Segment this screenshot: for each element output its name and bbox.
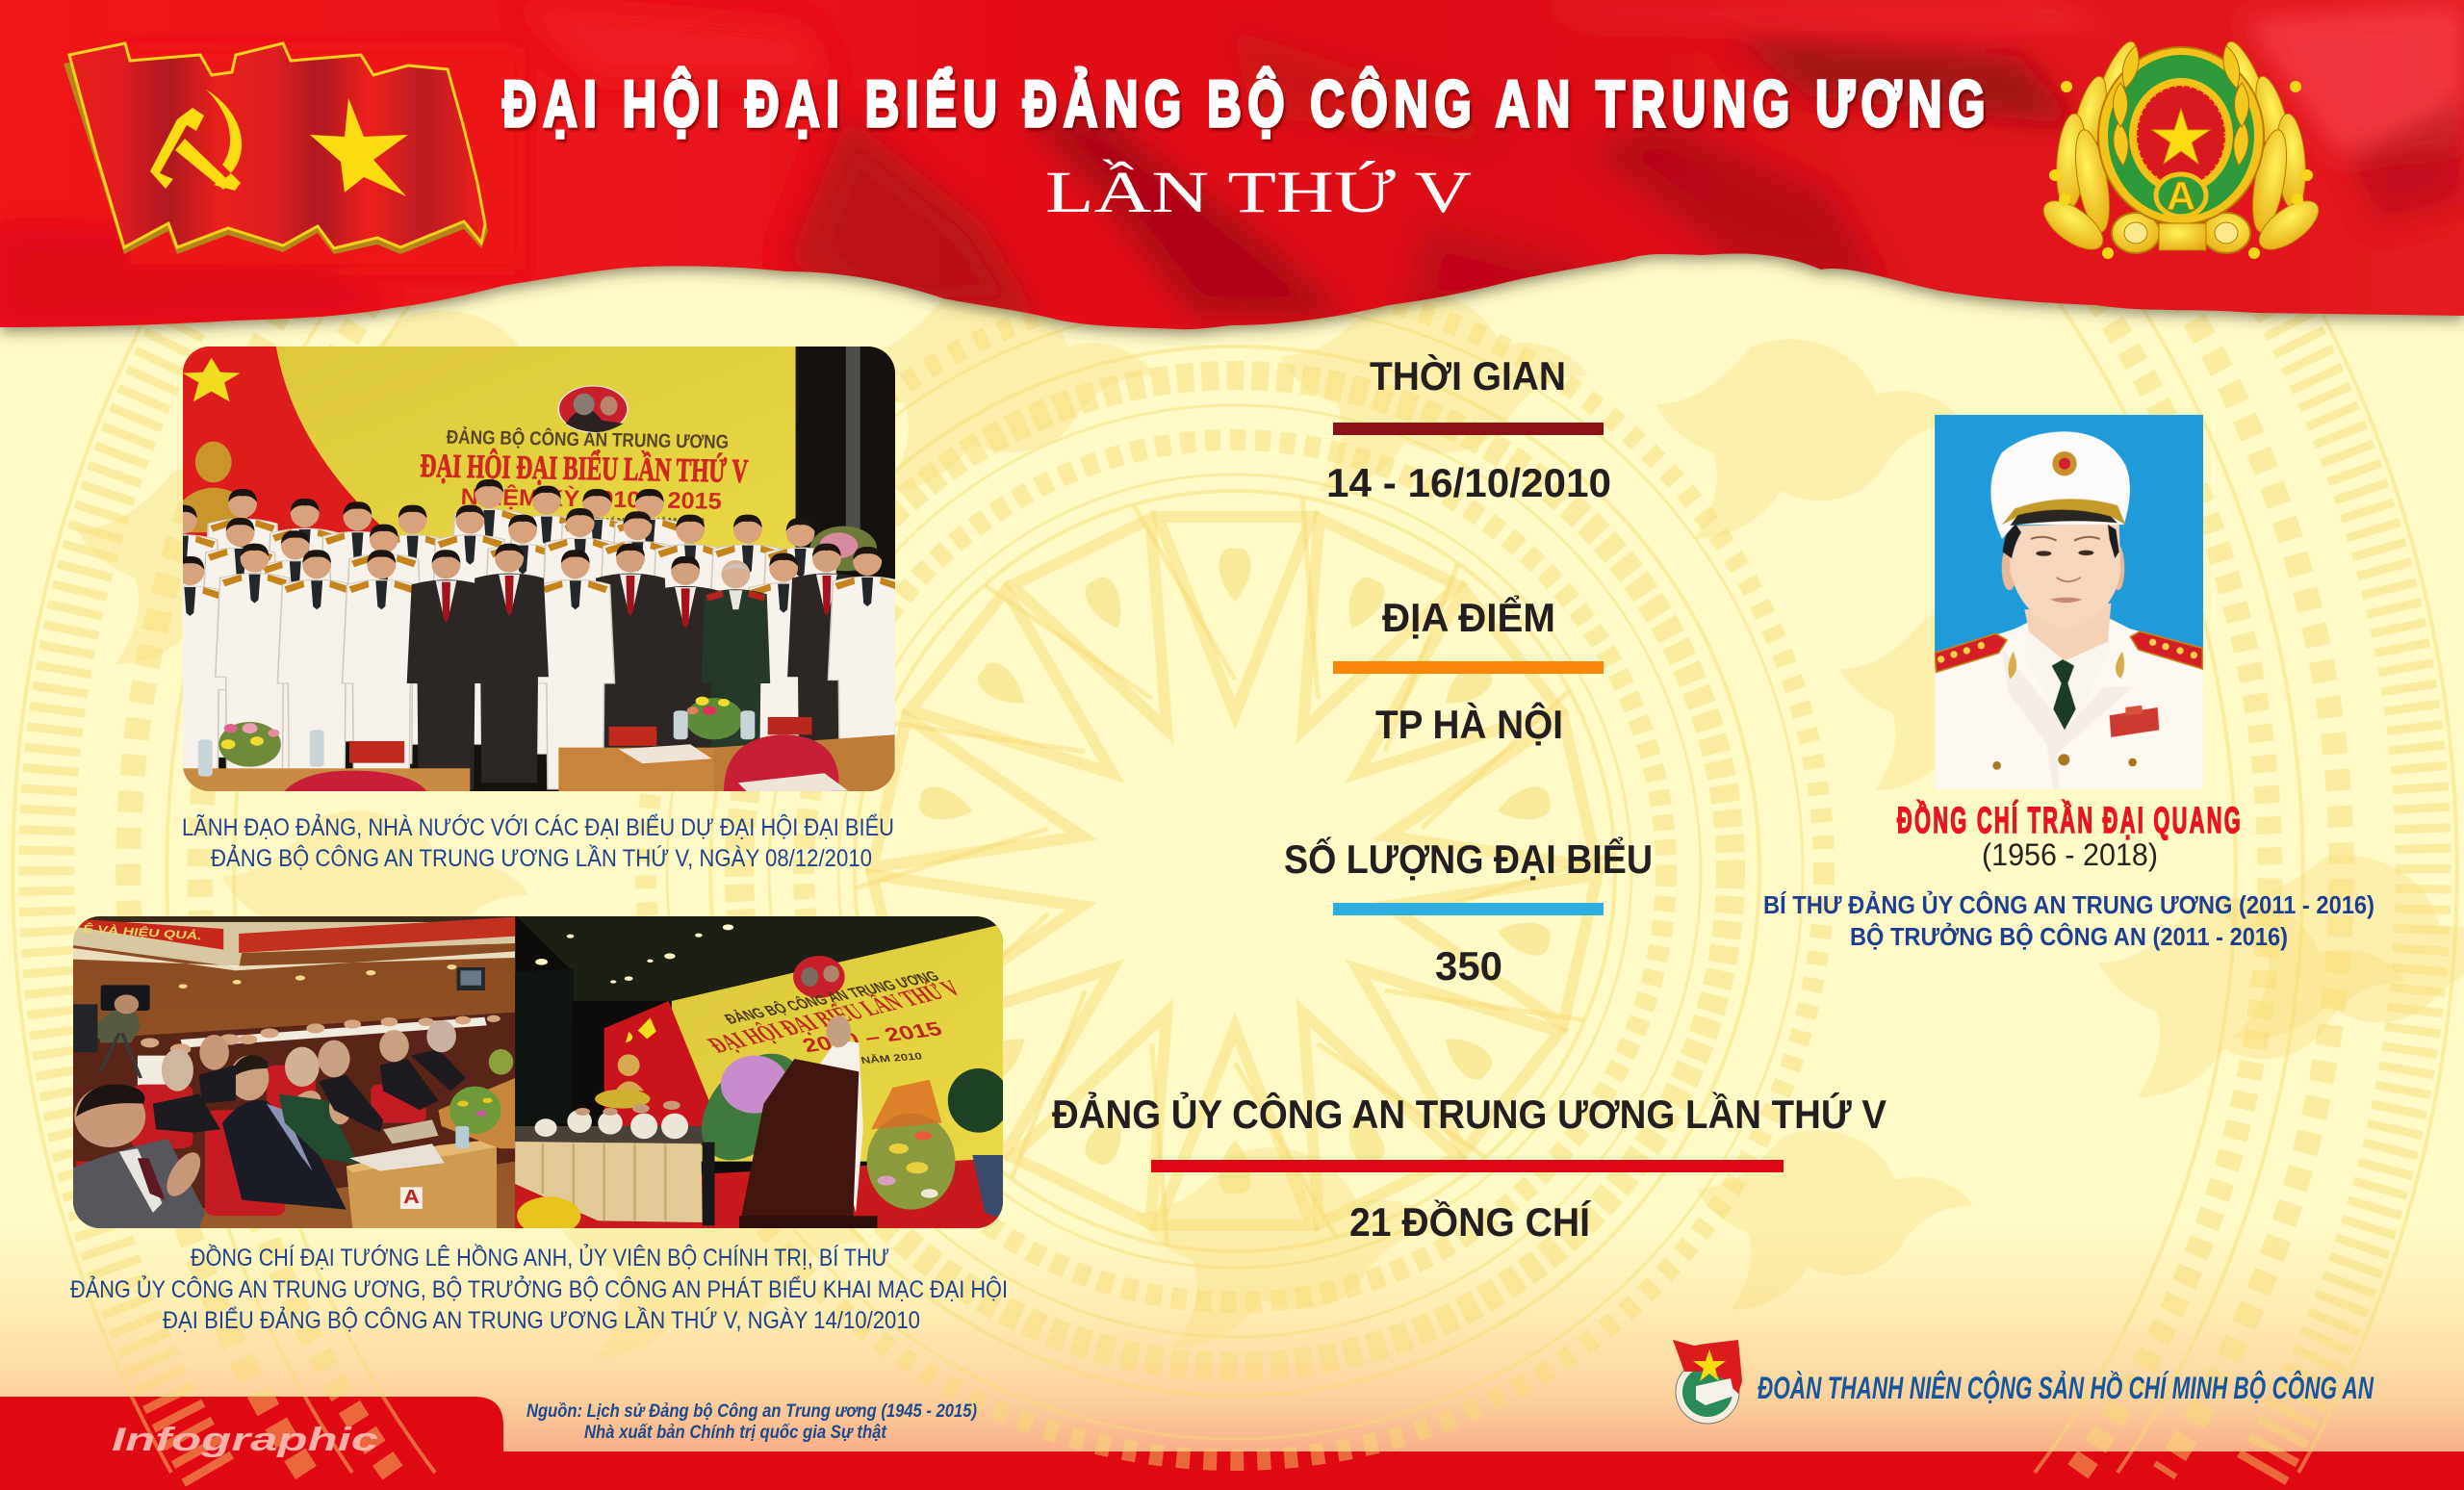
stat: delegates: 350 xyxy=(1435,943,1502,989)
photo: leaders and delegates group xyxy=(143,340,914,796)
source note: Nguồn: Lịch sử Đảng bộ Công an Trung ương (1945 - 2015) xyxy=(526,1401,977,1422)
delegates xyxy=(143,479,907,796)
wall lights xyxy=(179,964,457,989)
delegates tables xyxy=(346,1049,515,1228)
white uniform xyxy=(1935,618,2204,790)
stat: location xyxy=(1333,594,1604,747)
caption: photo 2: ĐẠI BIỂU ĐẢNG BỘ CÔNG AN TRUNG ƯƠNG LẦN THỨ V, NGÀY 14/10/2010 xyxy=(163,1305,920,1334)
peaked cap xyxy=(1990,431,2130,539)
photo: opening session of the congress: Ệ VÀ HIỆU QUẢ. xyxy=(82,922,203,942)
icon: public security emblem xyxy=(2036,37,2326,259)
stage backdrop text: ĐẢNG BỘ CÔNG AN TRUNG ƯƠNG xyxy=(721,968,943,1027)
stage: curtain and backdrop xyxy=(515,914,1006,1235)
stage medallion xyxy=(793,956,845,998)
stage lights xyxy=(535,924,733,984)
caption: photo 1: LÃNH ĐẠO ĐẢNG, NHÀ NƯỚC VỚI CÁC ĐẠI BIỂU DỰ ĐẠI HỘI ĐẠI BIỂU xyxy=(182,812,894,841)
source note: Nhà xuất bản Chính trị quốc gia Sự thật xyxy=(584,1423,887,1443)
backdrop text: NHIỆM KỲ 2010 – 2015 xyxy=(460,482,722,514)
speaker at lectern xyxy=(819,1040,863,1213)
stat: time xyxy=(1326,352,1611,505)
Marx and Lenin medallion xyxy=(558,386,628,432)
stat: party committee xyxy=(1052,1091,1886,1245)
backdrop red curve xyxy=(183,347,379,537)
table flowers and bottles xyxy=(198,697,755,777)
black tie xyxy=(2052,659,2076,730)
stat: location: ĐỊA ĐIỂM xyxy=(1382,594,1555,640)
front row suits xyxy=(153,1094,220,1133)
backdrop text: ĐẢNG BỘ CÔNG AN TRUNG ƯƠNG xyxy=(446,425,730,453)
stat: time: THỜI GIAN xyxy=(1370,352,1566,398)
caption: photo 1: ĐẢNG BỘ CÔNG AN TRUNG ƯƠNG LẦN THỨ V, NGÀY 08/12/2010 xyxy=(211,843,872,872)
stat: delegates xyxy=(1284,835,1653,989)
backdrop text: NỘI, NGÀY 14 THÁNG 10 NĂM 2010 xyxy=(518,516,705,526)
stage backdrop text xyxy=(702,968,966,1066)
right flower stands xyxy=(867,1068,1010,1220)
shoulder boards xyxy=(1935,633,2007,672)
lectern xyxy=(739,1059,859,1227)
icon: youth union logo xyxy=(1673,1340,1742,1424)
stage backdrop text: 2010 – 2015 xyxy=(799,1018,946,1057)
icon: emblem star xyxy=(2152,109,2210,164)
caption: photo 2: ĐỒNG CHÍ ĐẠI TƯỚNG LÊ HỒNG ANH, ỦY VIÊN BỘ CHÍNH TRỊ, BÍ THƯ xyxy=(191,1243,889,1272)
subtitle: LẦN THỨ V xyxy=(1045,159,1472,225)
seated delegate in grey suit xyxy=(73,1139,205,1228)
lectern bouquet xyxy=(683,1048,820,1166)
stat: time: 14 - 16/10/2010 xyxy=(1326,460,1611,505)
red banners xyxy=(79,919,223,950)
hall wall and ceiling xyxy=(58,914,515,1235)
backdrop text xyxy=(420,425,749,526)
yellow flowers xyxy=(517,1196,580,1235)
bronze bust xyxy=(183,442,247,532)
roles xyxy=(1763,889,2374,951)
icon: flag star xyxy=(310,98,408,196)
photo: portrait of Trần Đại Quang xyxy=(1935,415,2204,790)
photo: opening session of the congress: ĐẠI HỘI ĐẠI BIỂU LẦN THỨ V xyxy=(702,975,966,1058)
delegates tables: A xyxy=(403,1186,420,1208)
seated delegate in dark suit xyxy=(222,1100,346,1210)
caption: photo 2 xyxy=(70,1243,1008,1334)
camera operator xyxy=(73,985,150,1078)
roles: BỘ TRƯỞNG BỘ CÔNG AN (2011 - 2016) xyxy=(1850,921,2288,951)
caption: photo 2: ĐẢNG ỦY CÔNG AN TRUNG ƯƠNG, BỘ TRƯỞNG BỘ CÔNG AN PHÁT BIỂU KHAI MẠC ĐẠI HỘI xyxy=(70,1274,1008,1303)
stat: party committee: 21 ĐỒNG CHÍ xyxy=(1349,1198,1591,1245)
head table and chairs xyxy=(183,717,895,796)
bottom red band xyxy=(0,1397,2464,1490)
photo: leaders and delegates group: ĐẠI HỘI ĐẠI BIỂU LẦN THỨ V xyxy=(420,446,749,490)
buttons xyxy=(2058,754,2069,765)
lifespan: (1956 - 2018) xyxy=(1982,837,2158,872)
footer label: Infographic: Infographic xyxy=(112,1422,378,1458)
stage floor and presidium table xyxy=(515,1158,1003,1228)
header: red silk flag banner xyxy=(0,0,2464,332)
stat: party committee: ĐẢNG ỦY CÔNG AN TRUNG ƯƠNG LẦN THỨ V xyxy=(1052,1091,1886,1137)
icon: party flag with hammer, sickle and star xyxy=(64,43,488,254)
icon: hammer and sickle xyxy=(150,90,242,191)
photo: opening session of the congress xyxy=(58,914,1010,1235)
audience xyxy=(73,1013,515,1228)
background: drum birds xyxy=(77,291,2464,1357)
head and neck xyxy=(2024,604,2111,661)
caption: photo 1 xyxy=(182,812,894,872)
flag star xyxy=(183,358,241,401)
source note xyxy=(526,1401,977,1443)
general in green xyxy=(279,1094,359,1165)
stat: location: TP HÀ NỘI xyxy=(1375,701,1563,747)
stat: delegates: SỐ LƯỢNG ĐẠI BIỂU xyxy=(1284,835,1653,882)
medal ribbons xyxy=(2110,707,2159,737)
flowers right xyxy=(809,527,877,571)
stage backdrop text: NĂM 2010 xyxy=(860,1051,923,1066)
icon: public security emblem: A xyxy=(2167,173,2195,218)
roles: BÍ THƯ ĐẢNG ỦY CÔNG AN TRUNG ƯƠNG (2011 - 2016) xyxy=(1763,889,2374,919)
